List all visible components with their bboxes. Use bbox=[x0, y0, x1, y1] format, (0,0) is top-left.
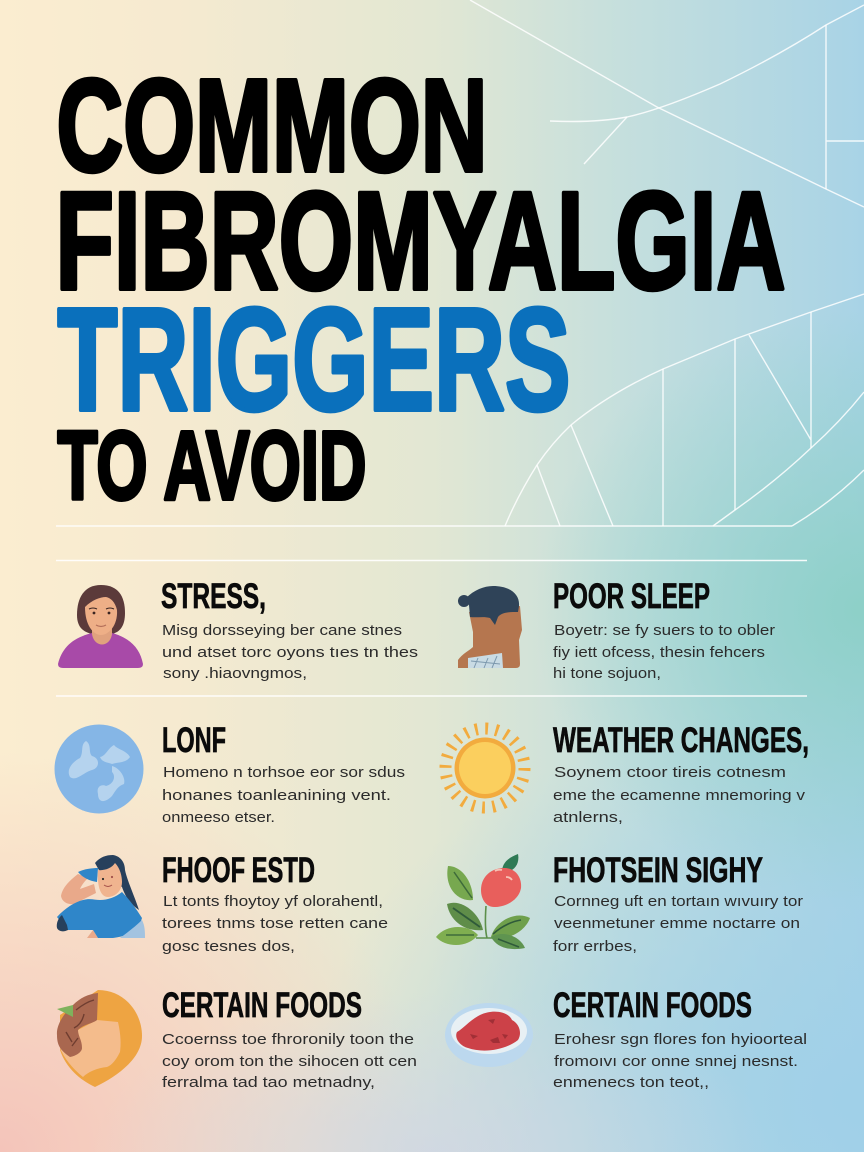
icon: blue circle bbox=[54, 724, 144, 814]
heading: FHOTSEIN SIGHY bbox=[553, 851, 763, 890]
decorative network lines bbox=[56, 0, 864, 526]
text block: hi tone sojuon, bbox=[553, 665, 661, 682]
text block: ferralma tad tao metnadny, bbox=[162, 1074, 375, 1091]
heading: CERTAIN FOODS bbox=[553, 986, 752, 1025]
icon: woman bbox=[58, 585, 143, 668]
icon: sun bbox=[446, 728, 524, 808]
heading: STRESS, bbox=[161, 577, 266, 616]
panel: stress bbox=[58, 577, 418, 682]
title: TO AVOID bbox=[58, 411, 366, 520]
panel: weather changes bbox=[446, 721, 809, 826]
heading: FHOOF ESTD bbox=[162, 851, 315, 890]
panel: fhoof estd bbox=[57, 851, 388, 955]
text block bbox=[162, 893, 388, 955]
text block: fiy iett ofcess, thesin fehcers bbox=[553, 644, 765, 661]
text block: coy orom ton the sihocen ott cen bbox=[162, 1053, 417, 1070]
text block: Erohesr sgn flores fon hyioorteal bbox=[554, 1031, 807, 1048]
panel: certain foods left bbox=[57, 986, 417, 1091]
text block: honanes toanleanining vent. bbox=[162, 787, 391, 804]
title bbox=[56, 52, 786, 520]
text block bbox=[162, 764, 405, 826]
text block bbox=[553, 622, 775, 682]
text block bbox=[553, 1031, 807, 1091]
text block: Boyetr: se fy suers to to obler bbox=[554, 622, 775, 639]
text block bbox=[553, 893, 803, 955]
text block: torees tnms tose retten cane bbox=[162, 915, 388, 932]
text block bbox=[162, 1031, 417, 1091]
text block: Cornneg uft en tortaın wıvuıry tor bbox=[554, 893, 803, 910]
icon: plant with fruit bbox=[436, 854, 530, 949]
text block: atnlerns, bbox=[553, 809, 623, 826]
text block: sony .hiaovngmos, bbox=[163, 665, 307, 682]
icon: head from behind bbox=[458, 586, 522, 668]
heading: CERTAIN FOODS bbox=[162, 986, 362, 1025]
icon: person stretching bbox=[57, 855, 145, 938]
text block: fromoıvı cor onne snnej nesnst. bbox=[554, 1053, 798, 1070]
heading: LONF bbox=[162, 721, 226, 760]
text block: Ccoernss toe fhroronily toon the bbox=[162, 1031, 414, 1048]
text block: veenmetuner emme noctarre on bbox=[554, 915, 800, 932]
text block: enmenecs ton teot,, bbox=[553, 1074, 709, 1091]
text block: onmeeso etser. bbox=[162, 809, 275, 826]
text block: Lt tonts fhoytoy yf olorahentl, bbox=[163, 893, 383, 910]
panel: fhotsein sighy bbox=[436, 851, 803, 955]
panel: lonf bbox=[54, 721, 405, 826]
panel: poor sleep bbox=[458, 577, 775, 682]
title: TRIGGERS bbox=[58, 278, 570, 441]
text block bbox=[162, 622, 418, 682]
text block: und atset torc oyons tıes tn thes bbox=[162, 644, 418, 661]
text block: gosc tesnes dos, bbox=[162, 938, 295, 955]
text block: Misg dorsseying ber cane stnes bbox=[162, 622, 402, 639]
text block: Homeno n torhsoe eor sor sdus bbox=[163, 764, 405, 781]
title: COMMON bbox=[56, 52, 488, 199]
text block: forr errbes, bbox=[553, 938, 637, 955]
heading: POOR SLEEP bbox=[553, 577, 710, 616]
icon: nut and orange bbox=[57, 990, 142, 1087]
text block: Soynem ctoor tireis cotnesm bbox=[554, 764, 786, 781]
panel: certain foods right bbox=[445, 986, 807, 1091]
text block: eme the ecamenne mnemoring v bbox=[553, 787, 806, 804]
text block bbox=[553, 764, 806, 826]
icon: bowl of meat bbox=[445, 1003, 533, 1067]
